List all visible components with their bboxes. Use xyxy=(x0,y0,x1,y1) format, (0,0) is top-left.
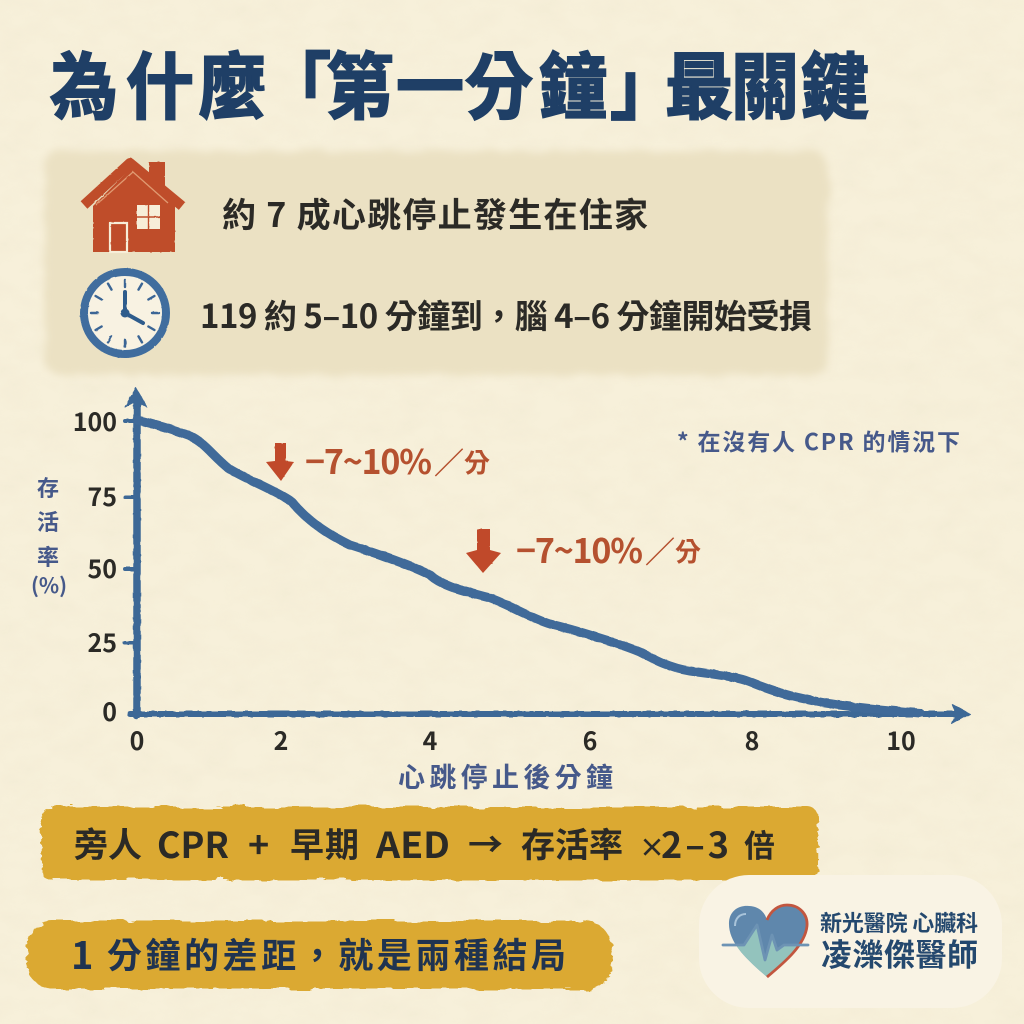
note: * 在沒有人 CPR 的情況下 xyxy=(677,423,960,457)
x axis label: 心跳停止後分鐘 xyxy=(398,756,613,795)
y axis label xyxy=(31,471,67,600)
text: doctor: 凌濼傑醫師 xyxy=(821,930,978,975)
panel: key facts xyxy=(45,151,828,375)
label: second drop rate xyxy=(516,524,701,573)
x axis ticks xyxy=(130,722,916,758)
label: first drop rate: 分 xyxy=(464,443,490,480)
icon: clock xyxy=(84,272,166,354)
banner: bystander CPR: AED xyxy=(375,817,450,869)
label: first drop rate: −7~10% xyxy=(305,435,432,484)
text: home statistic: 約 7 成心跳停止發生在住家 xyxy=(222,188,648,237)
y axis ticks: 25 xyxy=(87,624,117,660)
title: 為什麼「第一分鐘」最關鍵 xyxy=(50,29,869,135)
y axis label: 活 xyxy=(37,505,59,537)
banner: bystander CPR: CPR xyxy=(157,817,229,869)
label: first drop rate: ／ xyxy=(434,439,464,483)
x axis ticks: 10 xyxy=(886,722,916,758)
banner: bystander CPR: 早期 xyxy=(290,818,359,867)
x axis ticks: 6 xyxy=(583,722,597,758)
text: hospital: 新光醫院 心臟科 xyxy=(820,906,978,938)
x axis ticks: 4 xyxy=(423,722,438,758)
banner: bystander CPR xyxy=(41,807,818,880)
text: response time: 119 約 5–10 分鐘到，腦 4–6 分鐘開始受損 xyxy=(200,290,812,338)
arrow: second drop xyxy=(466,529,501,573)
y axis ticks: 75 xyxy=(87,478,117,514)
label: second drop rate: 分 xyxy=(675,532,701,569)
y axis ticks: 0 xyxy=(102,693,117,729)
y axis label: 存 xyxy=(37,471,59,503)
banner: bystander CPR: → xyxy=(468,818,503,867)
badge: hospital and doctor xyxy=(699,875,1002,1008)
label: second drop rate: ／ xyxy=(645,528,675,572)
y axis ticks: 50 xyxy=(87,550,117,586)
banner: bystander CPR: 2–3 xyxy=(661,817,729,869)
survival line xyxy=(137,420,920,713)
axes xyxy=(125,388,970,724)
icon: house xyxy=(84,162,182,252)
y axis label: 率 xyxy=(37,540,59,572)
x axis ticks: 8 xyxy=(745,722,759,758)
banner: bystander CPR: × xyxy=(639,828,665,865)
banner: bystander CPR: + xyxy=(248,817,269,869)
banner: one minute: 1 xyxy=(71,925,93,980)
banner: one minute xyxy=(27,921,611,989)
x axis ticks: 0 xyxy=(130,722,144,758)
y axis ticks xyxy=(73,403,117,729)
banner: bystander CPR: 存活率 xyxy=(521,818,623,867)
y axis ticks: 100 xyxy=(73,403,117,439)
arrow: first drop xyxy=(266,443,294,481)
banner: bystander CPR: 倍 xyxy=(744,821,775,866)
banner: one minute: 分鐘的差距，就是兩種結局 xyxy=(107,928,566,979)
label: first drop rate xyxy=(305,435,490,484)
chart: survival curve xyxy=(31,388,970,795)
y axis label: (%) xyxy=(31,570,67,600)
banner: bystander CPR: 旁人 xyxy=(74,818,142,867)
label: second drop rate: −7~10% xyxy=(516,524,643,573)
icon: heart xyxy=(722,904,810,978)
x axis ticks: 2 xyxy=(274,722,288,758)
